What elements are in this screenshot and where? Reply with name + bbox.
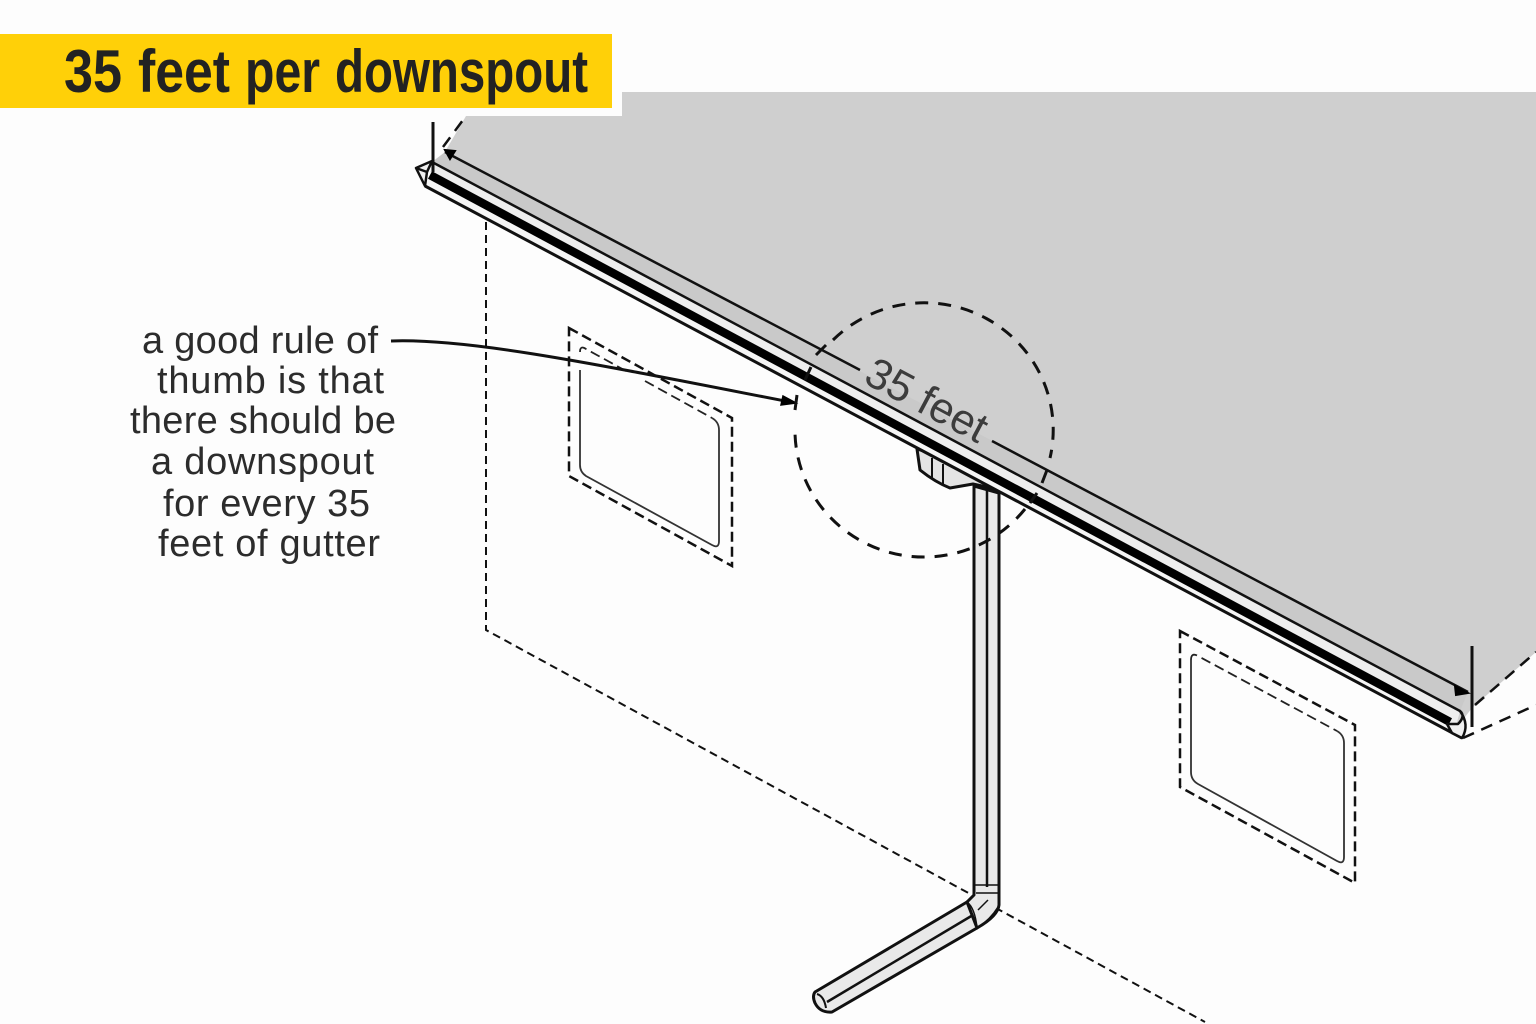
callout text: feet of gutter (158, 523, 380, 565)
gutter left end (416, 161, 432, 186)
horizontal pipe (814, 902, 977, 1012)
vertical pipe (967, 486, 999, 928)
roof surface (430, 92, 1536, 726)
right window (1180, 631, 1355, 883)
gutter (416, 161, 1466, 738)
title text: per (245, 38, 320, 105)
callout arrow (391, 341, 797, 410)
dimension line: 35 feet (433, 122, 1472, 727)
roof edge dashed outlines (443, 116, 1536, 738)
callout text (130, 320, 396, 565)
title text: downspout (335, 38, 588, 105)
wall outline (486, 222, 1205, 1022)
title text: 35 (64, 38, 122, 105)
35 feet circle (795, 303, 1053, 557)
gutter right end (1447, 711, 1466, 738)
title banner (0, 34, 612, 108)
title text: feet (138, 38, 230, 105)
downspout (814, 449, 1000, 1012)
left window (569, 328, 732, 566)
callout text: thumb is that (157, 360, 384, 402)
downspout outlet (917, 449, 1000, 490)
title text (64, 38, 588, 105)
callout text: for every 35 (163, 483, 370, 525)
callout text: a good rule of (142, 320, 378, 362)
callout text: a downspout (151, 441, 374, 483)
callout text: there should be (130, 400, 396, 442)
label: 35 feet: 35 feet (857, 348, 996, 453)
